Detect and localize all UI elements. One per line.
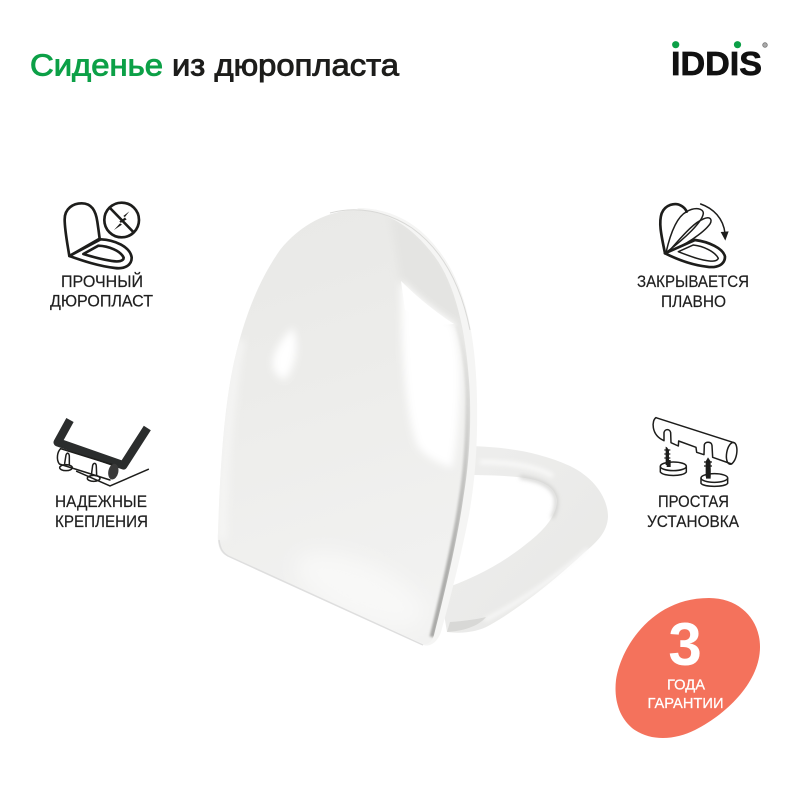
lid lower edge: [219, 540, 423, 645]
lid light: left edge: [233, 346, 240, 376]
title: из дюропласта: [172, 48, 400, 82]
label: durable thermoset: ПРОЧНЫЙ: [61, 272, 143, 291]
warranty badge: ГОДА: [667, 678, 705, 694]
label: easy installation: УСТАНОВКА: [647, 513, 739, 531]
lid shading: upper right: [454, 312, 459, 318]
warranty badge: [616, 598, 760, 738]
label: durable thermoset: ДЮРОПЛАСТ: [50, 292, 153, 310]
lid highlight: left: [273, 328, 296, 380]
warranty badge: ГАРАНТИИ: [648, 696, 724, 712]
label: easy installation: [647, 493, 739, 531]
title: [30, 48, 400, 82]
lid highlight: right: [401, 281, 461, 468]
title: Сиденье: [30, 48, 163, 82]
label: soft close: [637, 273, 749, 311]
product: toilet seat ring: [440, 446, 608, 633]
icon: soft close: [660, 204, 729, 267]
icon: reliable fasteners: [57, 420, 148, 486]
label: soft close: ПЛАВНО: [661, 293, 726, 311]
label: reliable fasteners: НАДЕЖНЫЕ: [55, 493, 147, 511]
label: easy installation: ПРОСТАЯ: [658, 493, 729, 511]
label: durable thermoset: [50, 272, 153, 310]
icon: durable thermoset: [65, 203, 139, 268]
label: reliable fasteners: КРЕПЛЕНИЯ: [55, 513, 148, 531]
lid edge band: [432, 325, 468, 637]
warranty badge: 3: [668, 611, 702, 678]
icon: easy installation: [653, 418, 738, 486]
label: soft close: ЗАКРЫВАЕТСЯ: [637, 273, 749, 291]
product: toilet seat lid: [218, 208, 477, 646]
lid highlight: lower: [285, 536, 435, 644]
lid top edge line: [330, 210, 470, 330]
lid face: [218, 210, 470, 644]
lid rim: [357, 208, 477, 645]
logo: IDDIS: IDDIS: [671, 45, 762, 82]
label: reliable fasteners: [55, 493, 148, 531]
